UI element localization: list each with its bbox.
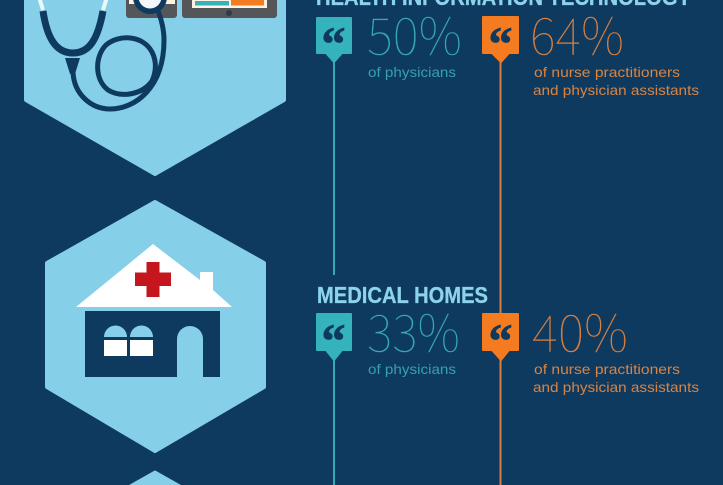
panel: medical homes icon hexagon xyxy=(47,202,264,451)
icon: teal quote bubble 1: “ xyxy=(322,18,346,71)
heading: medical homes: MEDICAL HOMES xyxy=(317,282,488,308)
icon: stethoscope xyxy=(39,0,167,109)
timeline line: physicians lower xyxy=(333,355,335,485)
stat: 40 percent of nurse practitioners and physician assistants: of nurse practitioners xyxy=(534,361,680,377)
stat: 40 percent of nurse practitioners and physician assistants: and physician assistants xyxy=(533,379,699,395)
icon: teal quote bubble 2: “ xyxy=(322,315,346,368)
icon: orange quote bubble 1 xyxy=(483,17,518,71)
icon: orange quote bubble 2 xyxy=(483,314,518,368)
stat: 40 percent of nurse practitioners and physician assistants xyxy=(532,292,699,395)
icon: orange quote bubble 2: “ xyxy=(488,315,512,368)
timeline line: physicians upper xyxy=(333,58,335,275)
stat: 64 percent of nurse practitioners and physician assistants xyxy=(530,0,699,98)
panel: health information technology icon hexagon xyxy=(26,0,284,174)
timeline line: nurse practitioners xyxy=(500,58,502,485)
icon: teal quote bubble 2 xyxy=(317,314,351,368)
stat: 33 percent of physicians: of physicians xyxy=(368,361,456,377)
stat: 64 percent of nurse practitioners and physician assistants: of nurse practitioners xyxy=(534,64,680,80)
stat: 40 percent of nurse practitioners and physician assistants: 40% xyxy=(532,292,628,367)
stat: 64 percent of nurse practitioners and physician assistants: and physician assistants xyxy=(533,82,699,98)
icon: smartphone xyxy=(126,0,177,18)
icon: house with medical cross xyxy=(76,244,232,377)
icon: orange quote bubble 1: “ xyxy=(488,18,512,71)
panel: next section hexagon, cropped xyxy=(118,472,192,485)
stat: 33 percent of physicians: 33% xyxy=(367,292,460,367)
stat: 50 percent of physicians: of physicians xyxy=(368,64,456,80)
icon: tablet xyxy=(182,0,277,18)
